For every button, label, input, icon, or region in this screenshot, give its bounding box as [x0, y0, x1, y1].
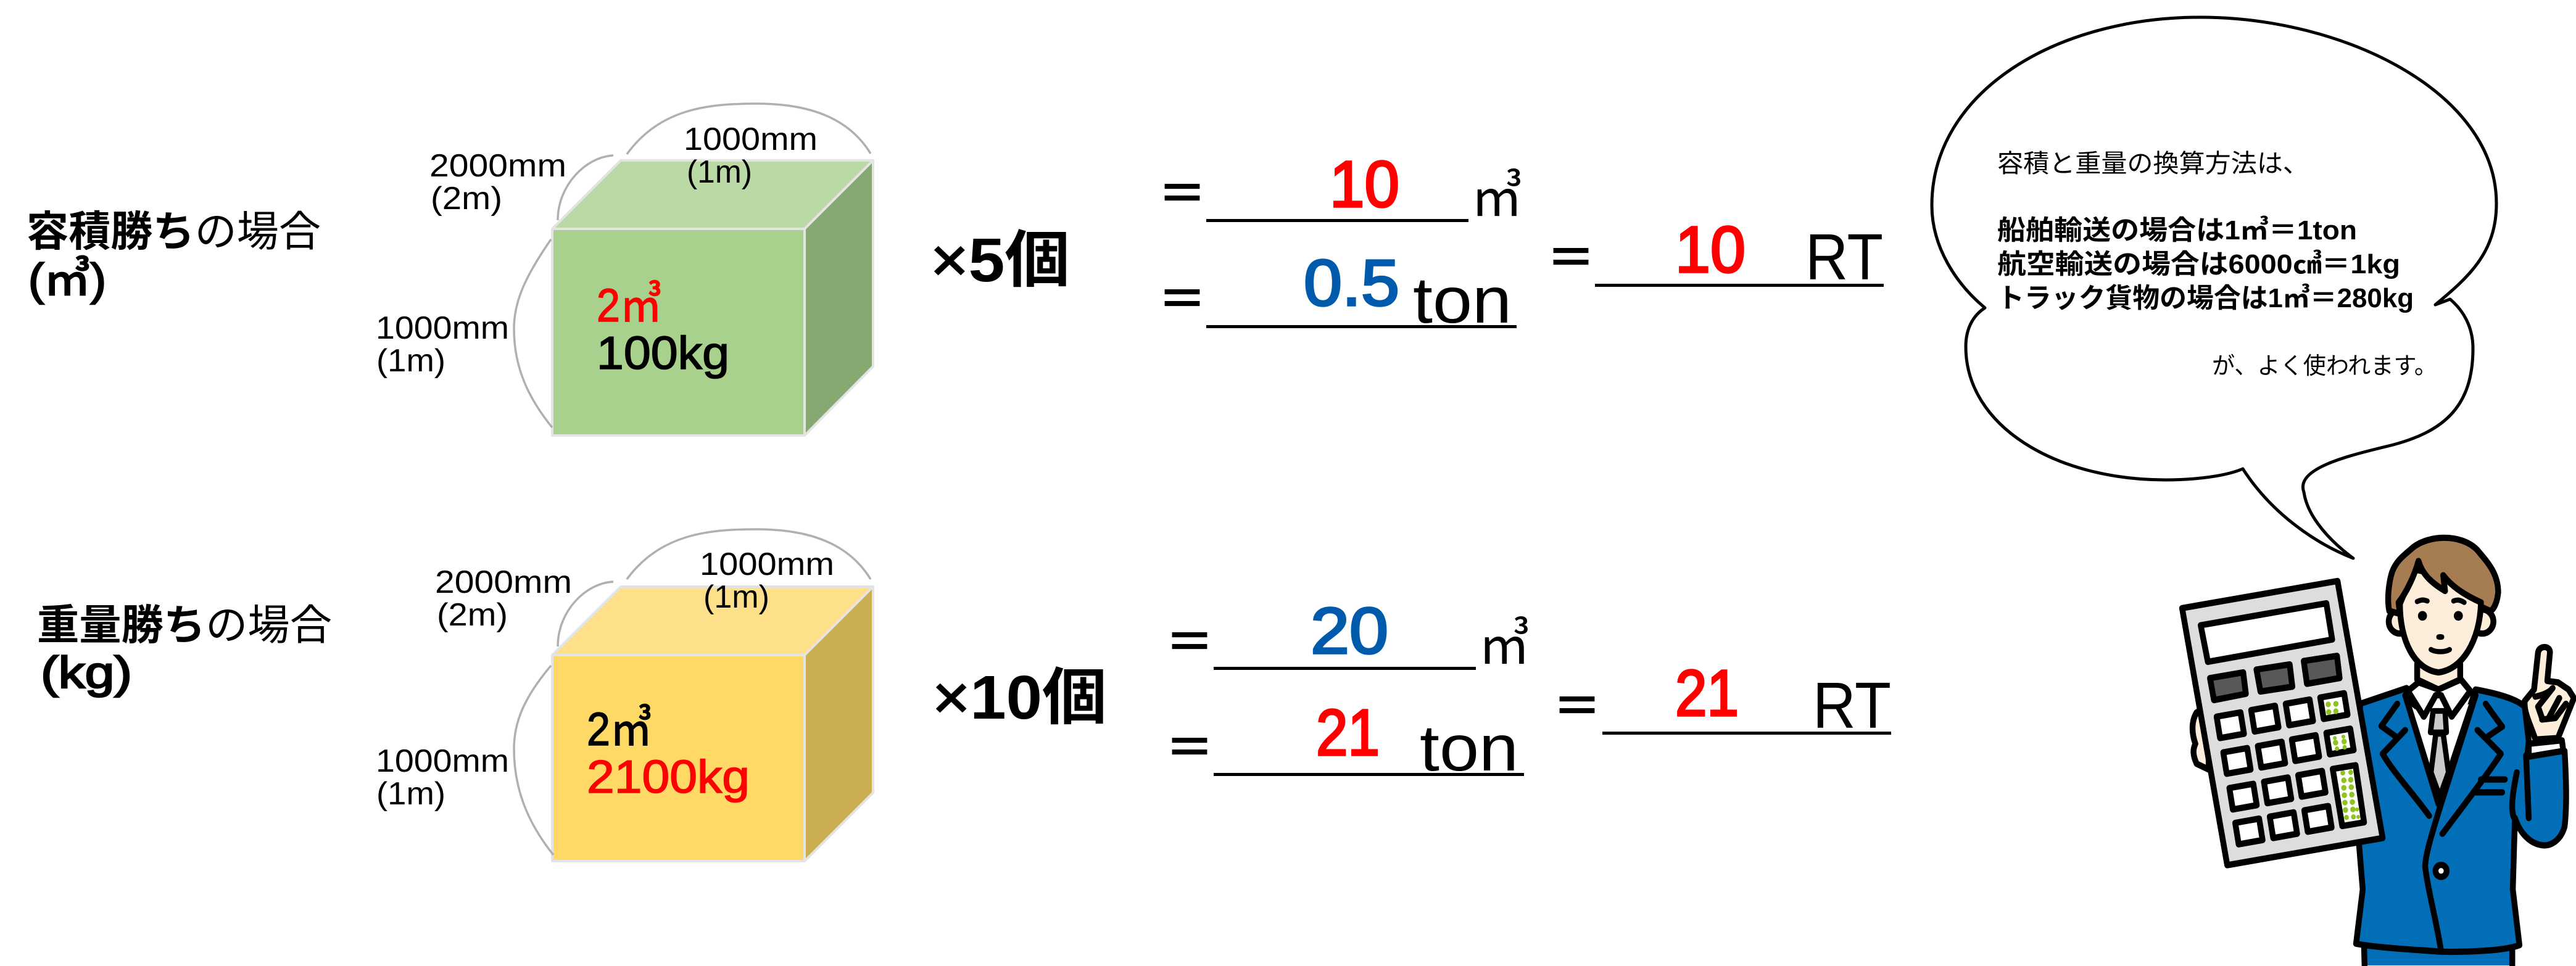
equation: revenue ton [1552, 657, 1891, 742]
icon: yellow cube [552, 587, 873, 861]
bubble text [1997, 149, 2437, 379]
equation: volume [1165, 595, 1530, 675]
multiplier: ×5個 [930, 226, 1070, 295]
equation: volume: ㎥ [1478, 614, 1530, 675]
cube label: volume and weight [587, 703, 750, 803]
dimension arcs [514, 104, 871, 427]
calculator display [2201, 603, 2332, 662]
cube label: volume and weight: 2㎥ [597, 279, 662, 332]
multiplier: ×10個 [932, 663, 1107, 732]
equation: volume: ＝ [1165, 603, 1214, 675]
dimension label: depth: (2m) [431, 181, 502, 217]
equation: volume: ㎥ [1471, 167, 1523, 228]
dimension label: depth: 2000mm [429, 148, 566, 184]
dimension label: depth: (2m) [437, 597, 508, 633]
bubble text: 航空輸送の場合は6000㎤＝1kg [1997, 249, 2400, 279]
heading: weight case: (kg) [41, 648, 132, 698]
equation: weight: ton [1413, 264, 1512, 337]
heading: volume case [27, 208, 321, 305]
finger lines [2535, 688, 2566, 719]
trouser legs [2364, 946, 2512, 965]
cube label: volume and weight [597, 279, 729, 379]
equation: revenue ton: RT [1813, 669, 1891, 742]
pointing hand [2525, 647, 2574, 740]
green dotted keys [2325, 701, 2360, 820]
jacket [2356, 688, 2566, 952]
bubble outline [1932, 17, 2496, 558]
heading: volume case: (㎥) [28, 255, 106, 305]
heading: weight case: 重量勝ちの場合 [37, 602, 332, 649]
function keys [2210, 656, 2340, 700]
number keys [2217, 693, 2364, 844]
equation: weight: ＝ [1158, 260, 1207, 332]
face [2400, 569, 2481, 672]
illustration: businessman with calculator [2182, 538, 2574, 965]
dimension label: height [376, 743, 509, 812]
equation: weight: 21 [1316, 696, 1380, 769]
dimension label: height: (1m) [376, 343, 445, 379]
bubble text: 船舶輸送の場合は1㎥＝1ton [1997, 215, 2357, 246]
collar [2408, 680, 2470, 717]
dimension label: width [684, 122, 818, 190]
panel: weight case [37, 529, 1891, 861]
dimension label: height: (1m) [376, 776, 445, 812]
equation: volume: 10 [1330, 148, 1399, 221]
shirt [2412, 695, 2469, 804]
heading: volume case: 容積勝ちの場合 [27, 208, 321, 255]
equation: revenue ton: 10 [1675, 213, 1746, 286]
dimension label: width [700, 547, 834, 615]
dimension label: width: (1m) [703, 579, 769, 615]
holding hand [2193, 711, 2209, 769]
equation: weight: ton [1420, 712, 1518, 785]
cube label: volume and weight: 2㎥ [587, 703, 652, 756]
heading: weight case [37, 602, 332, 698]
dimension arcs [514, 529, 871, 855]
equation: revenue ton: 21 [1675, 657, 1739, 730]
lapels and jacket seams [2381, 695, 2528, 951]
icon: green cube [552, 160, 873, 436]
cube label: volume and weight: 100kg [597, 327, 729, 379]
neck [2417, 664, 2460, 690]
equation: volume [1158, 148, 1523, 228]
equation: volume: 20 [1311, 595, 1388, 667]
dimension label: height: 1000mm [376, 743, 509, 779]
facial features [2417, 600, 2464, 651]
cuff [2528, 740, 2563, 757]
bubble text: トラック貨物の場合は1㎥＝280kg [1997, 283, 2414, 313]
hair [2388, 538, 2498, 614]
cube label: volume and weight: 2100kg [587, 751, 750, 803]
equation: revenue ton: ＝ [1546, 219, 1596, 291]
ears [2389, 609, 2493, 634]
calculator body [2182, 581, 2383, 865]
dimension label: width: (1m) [687, 154, 752, 190]
panel: volume case [27, 104, 1884, 436]
dimension label: width: 1000mm [684, 122, 818, 157]
equation: weight: ＝ [1165, 709, 1214, 780]
equation: weight [1158, 247, 1517, 337]
button [2435, 865, 2446, 877]
necktie [2430, 711, 2448, 796]
dimension label: depth: 2000mm [435, 564, 572, 600]
equation: revenue ton [1546, 213, 1884, 294]
dimension label: depth [429, 148, 566, 217]
dimension label: height [376, 310, 509, 379]
bubble text: が、よく使われます。 [2212, 353, 2437, 379]
equation: revenue ton: ＝ [1552, 667, 1602, 739]
dimension label: height: 1000mm [376, 310, 509, 346]
bubble text: 容積と重量の換算方法は、 [1997, 149, 2309, 178]
equation: weight [1165, 696, 1524, 785]
speech bubble [1932, 17, 2496, 558]
dimension label: depth [435, 564, 572, 633]
equation: weight: 0.5 [1304, 247, 1399, 320]
dimension label: width: 1000mm [700, 547, 834, 582]
equation: volume: ＝ [1158, 155, 1207, 226]
equation: revenue ton: RT [1805, 221, 1883, 294]
